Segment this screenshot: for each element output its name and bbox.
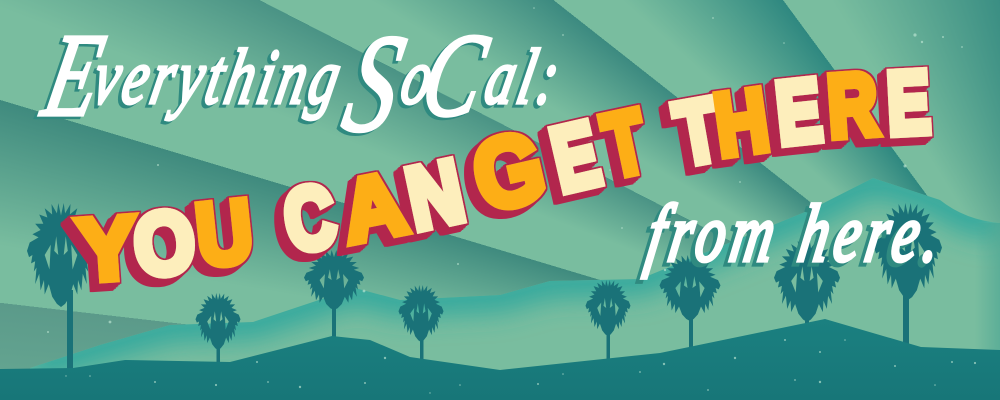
headline: YOU CAN GET THERE: A xyxy=(334,154,414,262)
script heading: Everything SoCal:: S xyxy=(329,8,412,164)
palm tree 7 xyxy=(774,240,840,325)
headline: YOU CAN GET THERE: T xyxy=(668,80,727,184)
script heading: Everything SoCal:: o xyxy=(391,36,441,123)
headline: YOU CAN GET THERE xyxy=(74,54,932,300)
script heading: Everything SoCal:: E xyxy=(29,11,111,144)
headline: YOU CAN GET THERE: E xyxy=(885,54,932,153)
headline: YOU CAN GET THERE: U xyxy=(192,182,257,285)
palm tree 6 xyxy=(660,255,720,348)
palm tree 8 xyxy=(874,203,942,345)
headline: YOU CAN GET THERE: G xyxy=(463,109,554,233)
script heading: Everything SoCal:: o xyxy=(394,33,445,120)
palm tree 4 xyxy=(398,285,444,360)
headline: YOU CAN GET THERE: E xyxy=(772,62,826,163)
script tagline: from here.: from here. xyxy=(641,189,954,279)
palm tree 1 xyxy=(27,203,95,370)
script heading: Everything SoCal:: verything xyxy=(86,33,352,120)
headline: YOU CAN GET THERE: C xyxy=(278,166,342,271)
headline: YOU CAN GET THERE: H xyxy=(709,71,774,175)
script heading: Everything SoCal:: S xyxy=(333,5,416,161)
script heading: Everything SoCal:: al: xyxy=(478,33,571,120)
script heading: Everything SoCal:: C xyxy=(408,11,494,144)
headline: YOU CAN GET THERE: O xyxy=(130,191,199,295)
palm tree 2 xyxy=(196,293,240,364)
foreground hills xyxy=(0,319,1000,400)
headline: YOU CAN GET THERE: Y xyxy=(74,197,140,300)
teal mountain range xyxy=(30,178,1000,370)
headline: YOU CAN GET THERE: R xyxy=(824,55,881,156)
script heading: Everything SoCal:: C xyxy=(412,8,498,141)
headline: YOU CAN GET THERE: N xyxy=(399,142,472,249)
script heading: Everything SoCal:: al: xyxy=(475,36,568,123)
palm tree 3 xyxy=(304,250,364,340)
script heading: Everything SoCal: xyxy=(25,5,577,164)
script tagline: from here.: from here. xyxy=(636,193,949,283)
script heading: Everything SoCal:: E xyxy=(32,8,114,141)
palm tree 5 xyxy=(586,280,630,360)
headline: YOU CAN GET THERE: T xyxy=(596,92,654,196)
script heading: Everything SoCal:: verything xyxy=(83,36,349,123)
headline: YOU CAN GET THERE: E xyxy=(542,102,608,211)
